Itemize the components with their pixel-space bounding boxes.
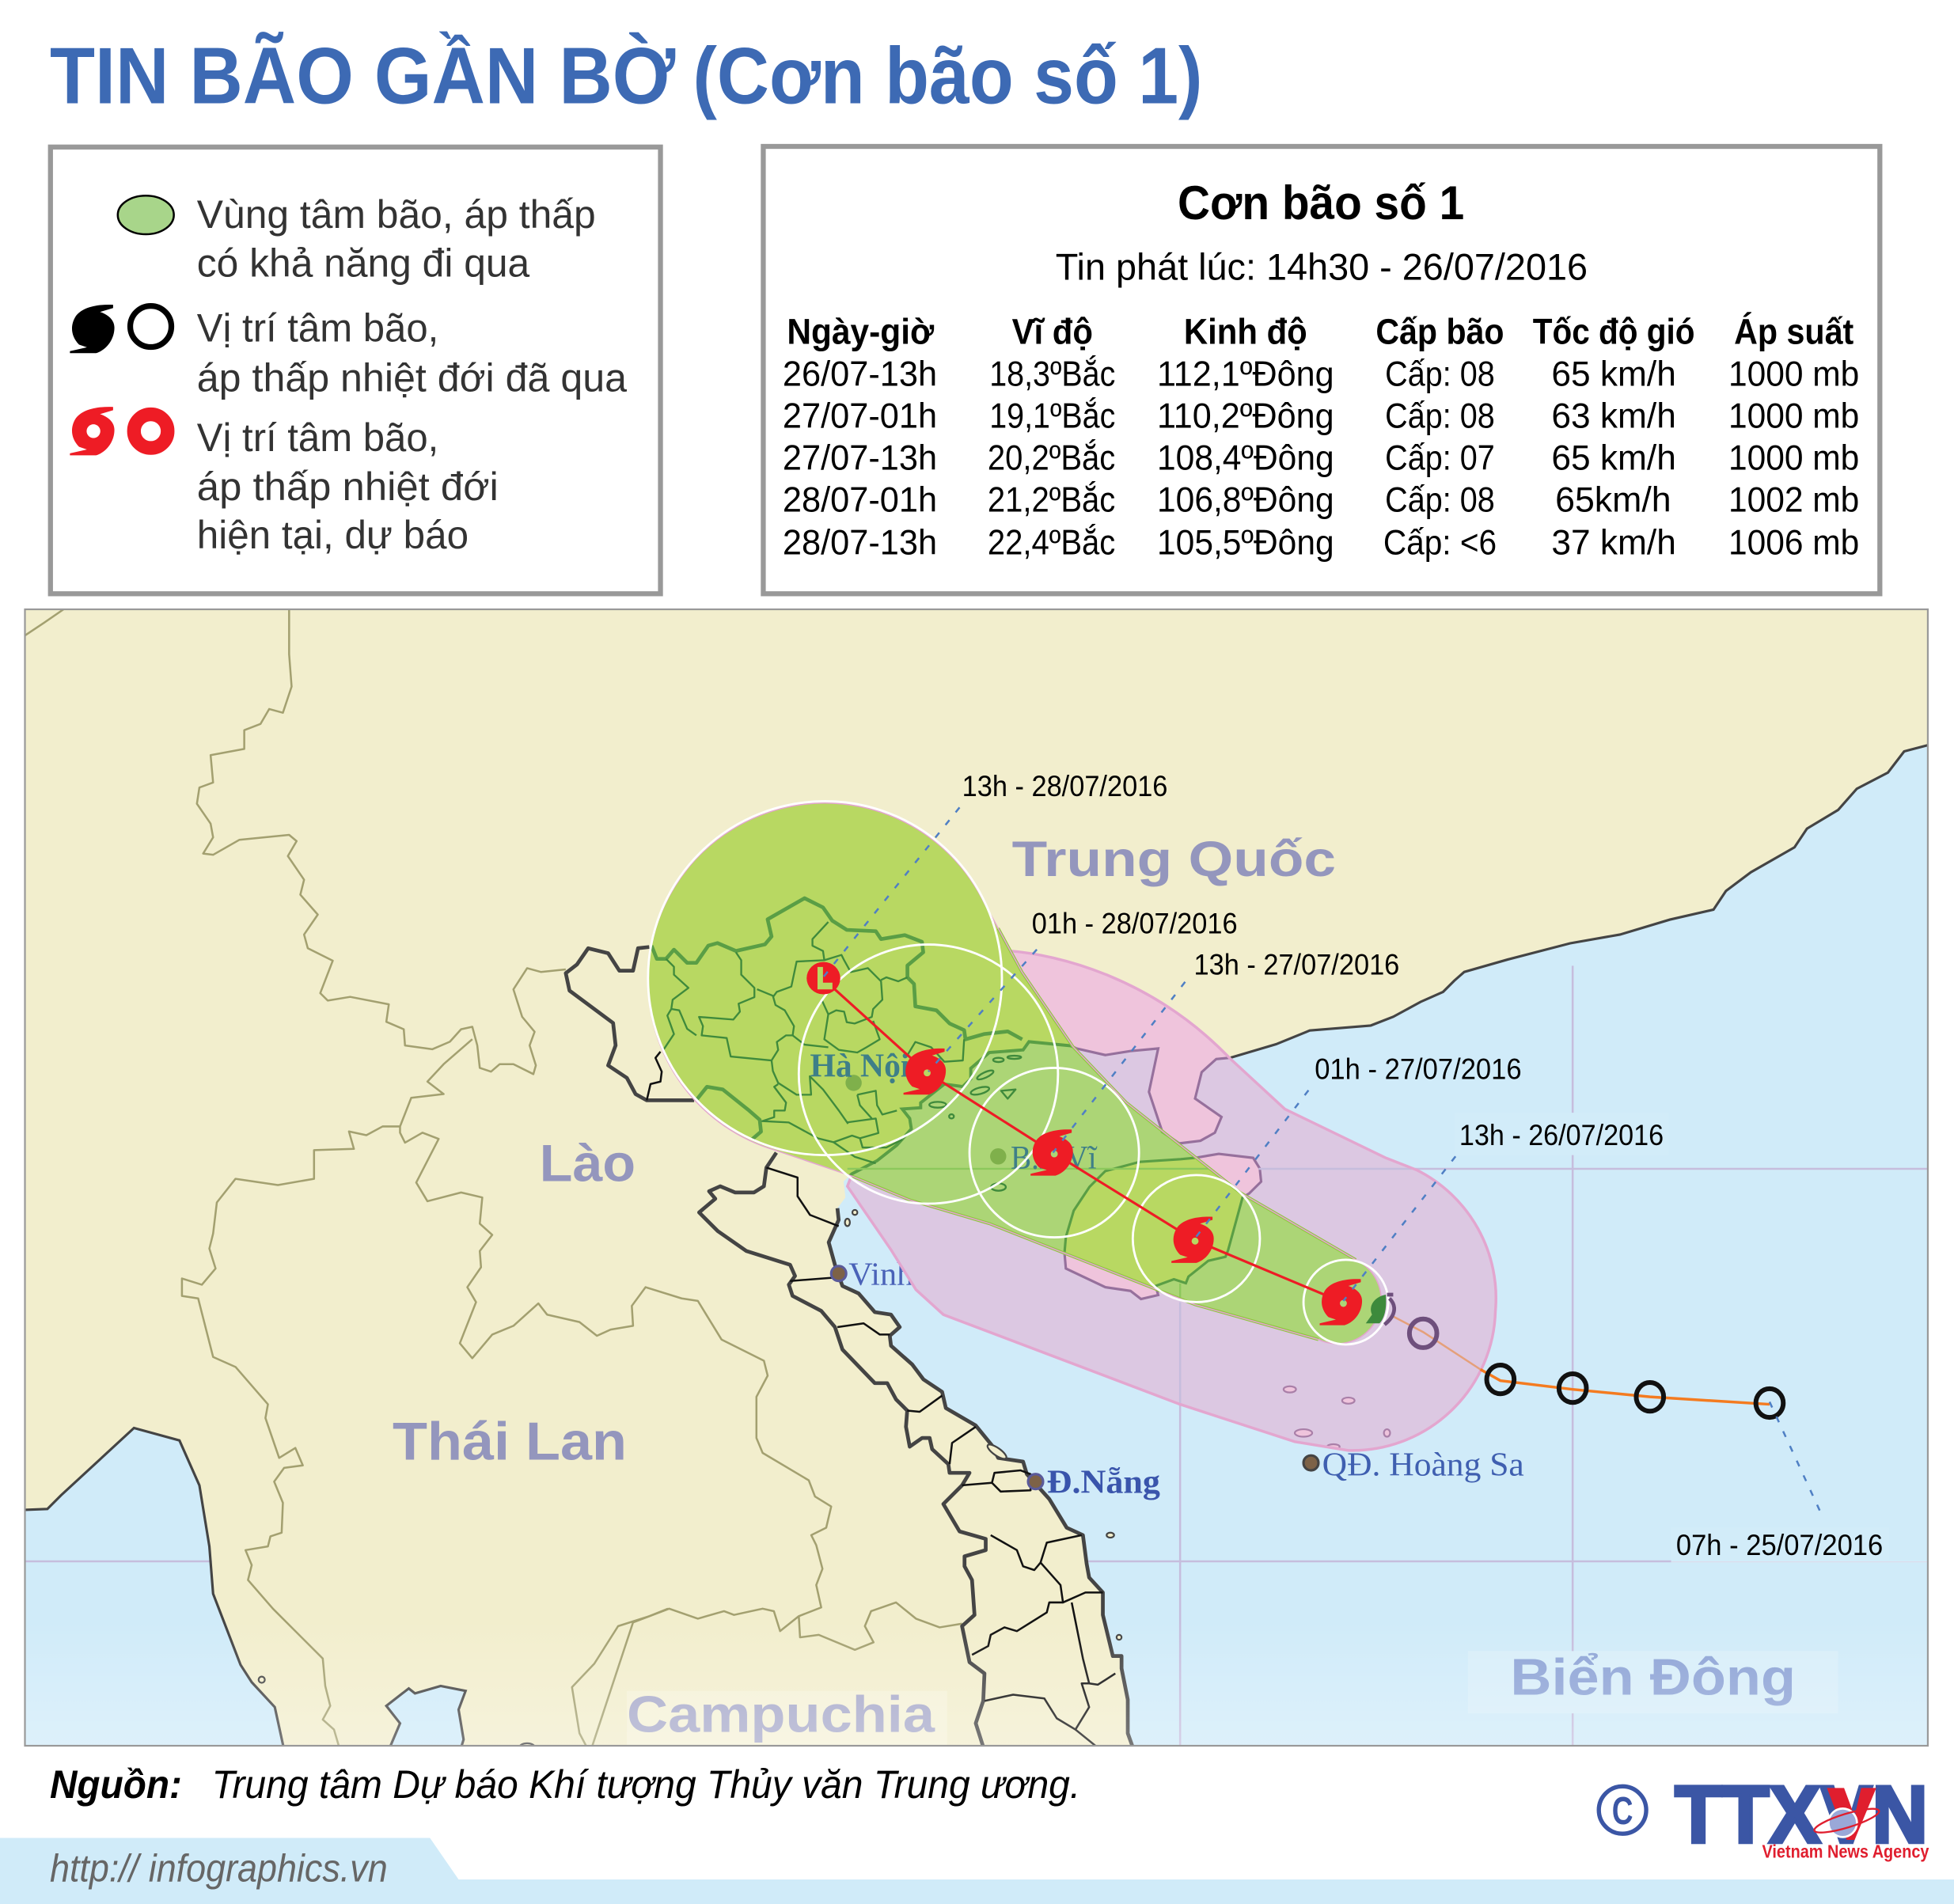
table header row: Cấp bão <box>1375 312 1504 352</box>
title: TIN BÃO GẦN BỜ <box>50 32 675 121</box>
storm marker 13h 26/07 <box>1320 1279 1362 1326</box>
legend item: forecast area: có khả năng đi qua <box>197 241 530 286</box>
panel: storm data table <box>763 146 1880 594</box>
source line: Nguồn: <box>50 1762 182 1807</box>
land base <box>25 609 1928 1746</box>
table rows: 65 km/h <box>1551 439 1676 478</box>
table rows: 106,8ºĐông <box>1157 481 1334 520</box>
table rows: 28/07-01h <box>783 481 937 520</box>
copyright symbol <box>1599 1786 1646 1834</box>
legend item: current and forecast positions: áp thấp nhiệt đới <box>197 464 499 509</box>
city label: Bạch Long Vĩ: B.L.Vĩ <box>1011 1140 1098 1177</box>
footer band <box>0 1838 1954 1904</box>
past track line near positions <box>1481 1369 1770 1405</box>
bottom fade <box>25 1620 1928 1746</box>
storm marker 01h 28/07 <box>904 1049 946 1094</box>
table heading: Cơn bão số 1 <box>1178 176 1464 229</box>
date labels: 13h - 27/07/2016 <box>1193 948 1399 980</box>
title <box>50 32 1203 121</box>
legend item: forecast area: Vùng tâm bão, áp thấp <box>197 192 596 237</box>
table rows: 27/07-13h <box>783 439 937 478</box>
city label: Hà Nội <box>810 1053 908 1091</box>
source line: Trung tâm Dự báo Khí tượng Thủy văn Trung ương. <box>212 1762 1080 1807</box>
table header row: Kinh độ <box>1184 312 1307 352</box>
logo: TTXVN <box>1599 1769 1929 1862</box>
city label: Vinh: Vinh <box>848 1256 913 1291</box>
table rows: 108,4ºĐông <box>1157 439 1334 478</box>
country label: Lào: Lào <box>540 1135 636 1193</box>
table rows: 18,3ºBắc <box>989 355 1115 394</box>
small islands <box>259 1210 1121 1750</box>
legend item: forecast area <box>118 192 596 286</box>
table rows: 112,1ºĐông <box>1157 355 1334 394</box>
website url: http:// infographics.vn <box>50 1848 388 1891</box>
table rows: 21,2ºBắc <box>988 481 1115 520</box>
table rows: 65 km/h <box>1551 355 1676 394</box>
table rows: 19,1ºBắc <box>989 396 1115 435</box>
panel: storm track map <box>13 609 1944 1757</box>
legend item: current and forecast positions: Vị trí tâm bão, <box>197 415 438 460</box>
city label: Đà Nẵng: Đ.Nẵng <box>1047 1463 1160 1500</box>
dashed leader lines <box>822 807 1822 1515</box>
date labels: 01h - 27/07/2016 <box>1315 1053 1522 1086</box>
table rows: 28/07-13h <box>783 524 937 563</box>
date labels <box>962 770 1883 1561</box>
table rows: 1006 mb <box>1728 524 1859 563</box>
table rows: 26/07-13h <box>783 355 937 394</box>
table rows: 110,2ºĐông <box>1157 396 1334 435</box>
pink forecast swath <box>845 950 1497 1452</box>
table rows: 1000 mb <box>1728 355 1859 394</box>
table header row: Áp suất <box>1734 312 1853 352</box>
legend item: past positions <box>70 305 628 400</box>
copyright symbol: C <box>1612 1790 1633 1833</box>
date labels: 13h - 26/07/2016 <box>1459 1119 1664 1151</box>
legend item: current and forecast positions <box>70 407 499 557</box>
city label: Hoàng Sa: QĐ. Hoàng Sa <box>1322 1446 1524 1483</box>
legend item: past positions: áp thấp nhiệt đới đã qua <box>197 355 628 400</box>
city label: Hà Nội: Hà Nội <box>810 1047 910 1084</box>
table rows: 27/07-01h <box>783 396 937 435</box>
table header row: Tốc độ gió <box>1533 312 1694 352</box>
sea areas <box>13 742 1944 1757</box>
storm marker 13h 28/07 <box>806 962 840 995</box>
forecast track line <box>834 989 1323 1295</box>
table rows: 105,5ºĐông <box>1157 524 1334 563</box>
red V and globe <box>1812 1788 1881 1840</box>
table rows: 65km/h <box>1555 481 1671 520</box>
table rows: Cấp: 08 <box>1385 396 1495 435</box>
past track line <box>1392 1316 1481 1369</box>
country label: Trung Quốc: Trung Quốc <box>1012 832 1336 887</box>
agency name: Vietnam News Agency <box>1762 1841 1929 1862</box>
latitude and longitude grid <box>25 965 1928 1746</box>
storm marker 13h 27/07 <box>1030 1129 1073 1176</box>
table rows <box>783 355 1859 563</box>
legend item: current and forecast positions: hiện tại, dự báo <box>197 512 469 557</box>
table rows: 63 km/h <box>1551 396 1676 435</box>
date label backgrounds <box>1455 1113 1928 1563</box>
table rows: 1002 mb <box>1728 481 1859 520</box>
sea label: Biển Đông: Biển Đông <box>1510 1648 1796 1705</box>
table rows: 22,4ºBắc <box>988 524 1115 563</box>
title: (Cơn bão số 1) <box>692 32 1203 121</box>
legend frame <box>51 147 661 594</box>
table rows: Cấp: 07 <box>1385 439 1495 478</box>
coastlines <box>13 745 1928 1756</box>
table rows: 1000 mb <box>1728 439 1859 478</box>
international borders <box>25 609 962 1754</box>
vietnam coast <box>829 1208 1134 1750</box>
city label: Bạch Long Vĩ <box>990 1146 1097 1170</box>
country label: Campuchia: Campuchia <box>627 1686 935 1743</box>
table rows: 20,2ºBắc <box>988 439 1115 478</box>
panel: legend <box>51 147 661 594</box>
hainan island <box>1064 1154 1262 1299</box>
table rows: Cấp: 08 <box>1385 355 1495 394</box>
legend item: past positions: Vị trí tâm bão, <box>197 305 438 350</box>
table header row: Ngày-giờ <box>787 312 935 352</box>
green probable storm area <box>649 802 1382 1345</box>
table rows: 1000 mb <box>1728 396 1859 435</box>
table rows: Cấp: 08 <box>1385 481 1495 520</box>
map frame <box>25 609 1928 1746</box>
date labels: 01h - 28/07/2016 <box>1032 907 1238 939</box>
storm marker 01h 27/07 <box>1171 1216 1214 1263</box>
TTXVN wordmark: TTXVN <box>1675 1769 1928 1860</box>
table rows: Cấp: <6 <box>1383 524 1497 563</box>
table rows: 37 km/h <box>1551 524 1676 563</box>
past position markers <box>1410 1319 1783 1417</box>
table header row: Vĩ độ <box>1012 312 1093 352</box>
date labels: 13h - 28/07/2016 <box>962 770 1167 802</box>
provincial borders <box>647 1052 1115 1750</box>
table header row <box>787 312 1853 352</box>
radius circles <box>648 801 1388 1345</box>
country label: Thái Lan: Thái Lan <box>393 1413 627 1472</box>
past storm symbol under cone <box>1366 1295 1394 1325</box>
vietnam land borders <box>566 947 986 1750</box>
issue time: Tin phát lúc: 14h30 - 26/07/2016 <box>1056 246 1588 288</box>
city label: Vinh <box>829 1262 912 1285</box>
date labels: 07h - 25/07/2016 <box>1676 1529 1883 1561</box>
table frame <box>763 146 1880 594</box>
